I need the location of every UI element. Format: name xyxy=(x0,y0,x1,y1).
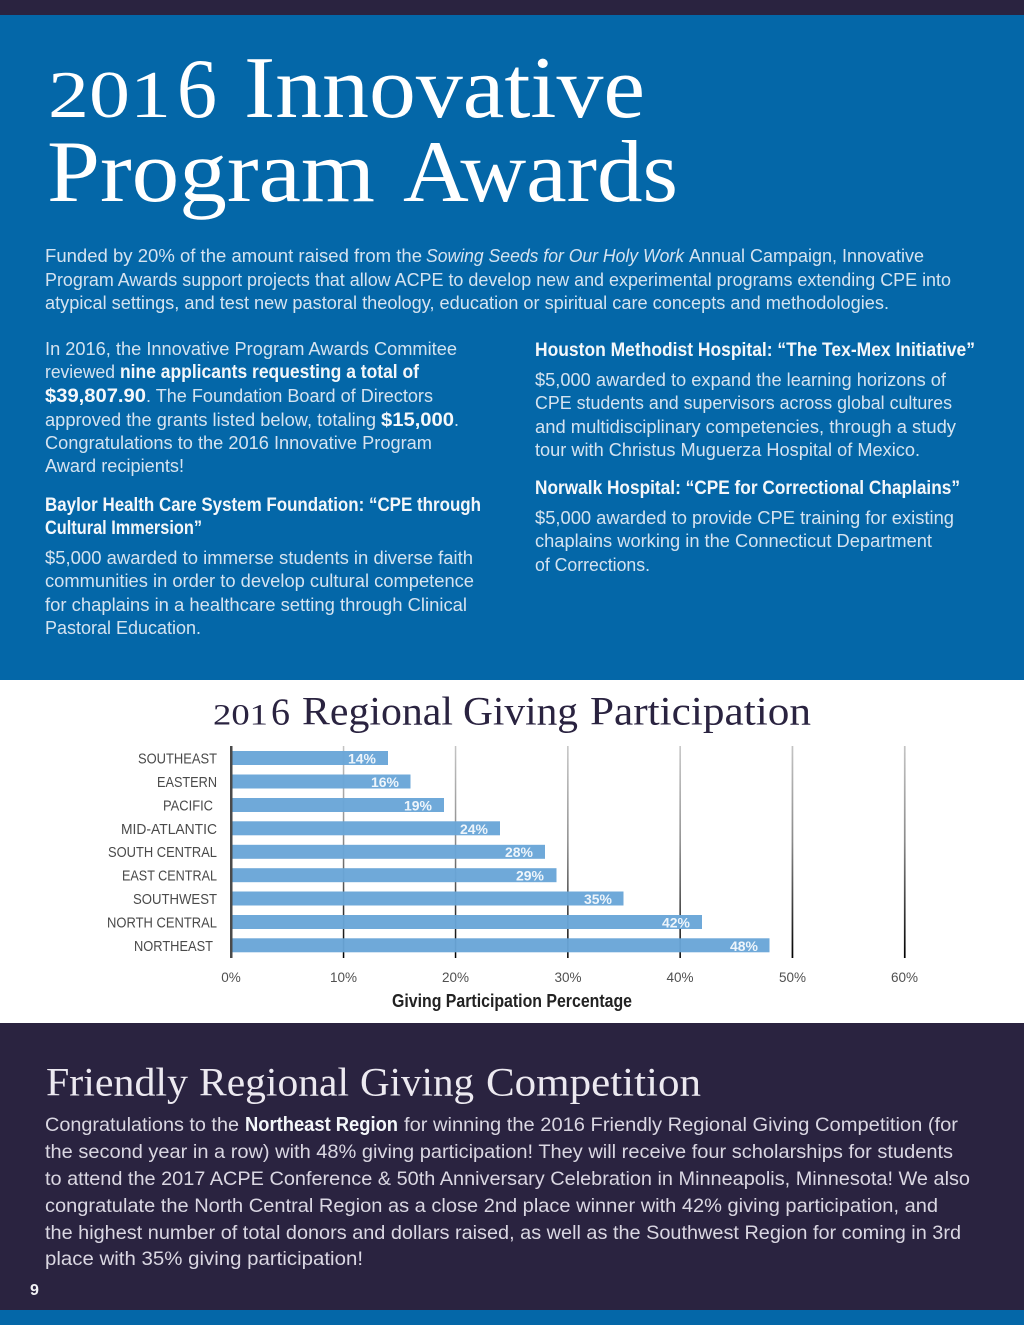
text block: Houston Methodist award: Houston Methodist Hospital: “The Tex-Mex Initiative” xyxy=(535,339,975,361)
text block: Norwalk award: Norwalk Hospital: “CPE for Correctional Chaplains” xyxy=(535,477,960,499)
competition text: the highest number of total donors and dollars raised, as well as the Southwest Region for coming in 3rd xyxy=(45,1222,961,1244)
text block: Houston Methodist award xyxy=(535,339,975,460)
bar chart: 29% xyxy=(516,868,544,884)
chart heading xyxy=(213,688,811,734)
competition text xyxy=(45,1114,970,1270)
competition text: for winning the 2016 Friendly Regional Giving Competition (for xyxy=(404,1114,959,1136)
competition heading: Giving xyxy=(360,1060,474,1104)
text block: Norwalk award xyxy=(535,477,960,575)
text block: Baylor award: communities in order to develop cultural competence xyxy=(45,571,474,591)
text block: committee summary: Congratulations to the 2016 Innovative Program xyxy=(45,433,432,453)
bar chart: 20% xyxy=(442,970,469,985)
bar chart: NORTHEAST xyxy=(134,939,213,955)
competition heading: Competition xyxy=(486,1060,701,1104)
bar chart: 40% xyxy=(666,970,694,985)
text block: Houston Methodist award: tour with Christus Muguerza Hospital of Mexico. xyxy=(535,440,920,460)
title: Awards xyxy=(403,124,678,221)
text block: Houston Methodist award: and multidisciplinary competencies, through a study xyxy=(535,417,956,437)
title: 6 xyxy=(177,42,217,136)
text block: committee summary: In 2016, the Innovative Program Awards Commitee xyxy=(45,339,457,359)
page number: 9 xyxy=(30,1282,39,1299)
chart heading: Participation xyxy=(590,688,811,734)
chart heading: 201 xyxy=(213,698,268,732)
x axis title: Giving Participation Percentage xyxy=(392,991,632,1011)
intro paragraph: Funded by 20% of the amount raised from the xyxy=(45,246,422,266)
bar chart: EASTERN xyxy=(157,775,217,791)
chart heading: 6 xyxy=(271,692,290,734)
bar chart: 16% xyxy=(371,775,399,790)
bar chart: 19% xyxy=(404,798,432,814)
intro paragraph: Program Awards support projects that allow ACPE to develop new and experimental programs extending CPE into xyxy=(45,270,951,290)
text block: Baylor award: $5,000 awarded to immerse students in diverse faith xyxy=(45,548,473,568)
panel: friendly regional giving competition xyxy=(0,1023,1024,1310)
text block: committee summary: approved the grants listed below, totaling xyxy=(45,410,376,430)
bar chart: 42% xyxy=(662,916,690,930)
competition heading xyxy=(46,1060,701,1104)
bar chart: SOUTHEAST xyxy=(138,752,217,768)
title xyxy=(47,40,678,221)
text block: Baylor award: for chaplains in a healthcare setting through Clinical xyxy=(45,595,467,615)
bar chart: 35% xyxy=(584,892,612,907)
competition heading: Friendly xyxy=(46,1060,188,1104)
panel: regional giving chart xyxy=(0,680,1024,1023)
bar chart: 48% xyxy=(730,939,758,954)
bar chart: 30% xyxy=(554,970,582,985)
text block: committee summary: Award recipients! xyxy=(45,456,184,476)
competition heading: Regional xyxy=(199,1060,349,1104)
bar chart: PACIFIC xyxy=(163,798,213,814)
competition text: Northeast Region xyxy=(245,1114,398,1136)
text block: committee summary: reviewed xyxy=(45,362,115,382)
bar chart: SOUTH CENTRAL xyxy=(108,845,217,861)
text block: Baylor award xyxy=(45,494,481,638)
text block: Norwalk award: chaplains working in the Connecticut Department xyxy=(535,531,932,551)
competition text: the second year in a row) with 48% giving participation! They will receive four scholarships for students xyxy=(45,1141,953,1163)
bar chart: NORTH CENTRAL xyxy=(107,916,217,932)
text block: Houston Methodist award: $5,000 awarded to expand the learning horizons of xyxy=(535,370,947,390)
bar chart: 0% xyxy=(221,970,241,985)
text block: Baylor award: Baylor Health Care System Foundation: “CPE through xyxy=(45,494,481,516)
competition text: place with 35% giving participation! xyxy=(45,1248,363,1270)
bar chart: MID-ATLANTIC xyxy=(121,822,217,838)
text block: committee summary: $15,000 xyxy=(381,409,454,431)
title: Program xyxy=(47,124,375,221)
competition text: to attend the 2017 ACPE Conference & 50th Anniversary Celebration in Minneapolis, Minnesota! We also xyxy=(45,1168,970,1190)
panel: innovative program awards xyxy=(0,15,1024,680)
title: Innovative xyxy=(244,40,645,137)
intro paragraph: Sowing Seeds for Our Holy Work xyxy=(426,246,685,266)
intro paragraph xyxy=(45,246,951,313)
bar chart: 14% xyxy=(348,752,376,766)
chart heading: Regional xyxy=(302,688,453,734)
bar chart: 28% xyxy=(505,845,533,860)
chart heading: Giving xyxy=(463,688,578,734)
bar chart: EAST CENTRAL xyxy=(122,868,217,884)
bar chart: 10% xyxy=(330,970,357,985)
text block: committee summary xyxy=(45,339,459,476)
text block: Norwalk award: of Corrections. xyxy=(535,555,650,575)
text block: committee summary: $39,807.90 xyxy=(45,385,146,407)
bar chart: 24% xyxy=(460,822,488,837)
text block: committee summary: . The Foundation Board of Directors xyxy=(146,386,433,406)
title: 201 xyxy=(48,58,171,132)
intro paragraph: Annual Campaign, Innovative xyxy=(689,246,924,266)
text block: committee summary: nine applicants requesting a total of xyxy=(120,361,419,383)
bar chart: 60% xyxy=(891,970,918,985)
text block: Norwalk award: $5,000 awarded to provide CPE training for existing xyxy=(535,508,954,528)
bar chart: SOUTHWEST xyxy=(133,892,217,908)
bar chart xyxy=(107,746,918,985)
intro paragraph: atypical settings, and test new pastoral theology, education or spiritual care concepts and methodologies. xyxy=(45,293,889,313)
text block: committee summary: . xyxy=(454,410,459,430)
bar chart: 50% xyxy=(779,970,806,985)
competition text: congratulate the North Central Region as a close 2nd place winner with 42% giving participation, and xyxy=(45,1195,938,1217)
text block: Houston Methodist award: CPE students and supervisors across global cultures xyxy=(535,393,952,413)
text block: Baylor award: Cultural Immersion” xyxy=(45,517,202,539)
competition text: Congratulations to the xyxy=(45,1114,239,1136)
text block: Baylor award: Pastoral Education. xyxy=(45,618,201,638)
